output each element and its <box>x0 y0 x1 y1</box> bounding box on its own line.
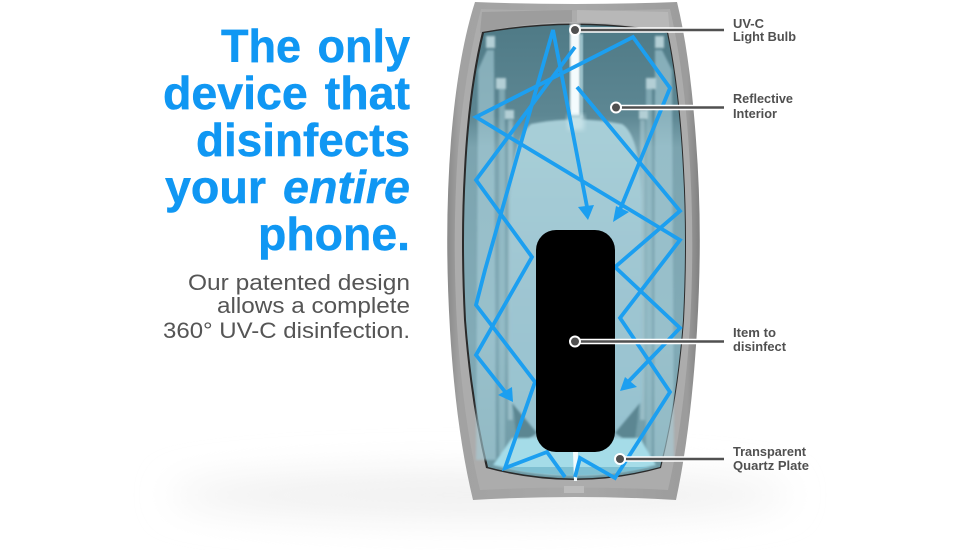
label: UV-C light bulb: UV-C <box>733 16 765 31</box>
black item to disinfect <box>536 230 615 452</box>
arrowhead centre right <box>613 206 629 222</box>
label: reflective interior: Interior <box>733 106 777 121</box>
label: reflective interior: Reflective <box>733 91 793 106</box>
central reflective pod <box>510 120 642 445</box>
title: disinfects <box>196 114 410 166</box>
arrowhead centre left <box>578 205 594 220</box>
leader: UV-C light bulb <box>570 25 724 35</box>
label: transparent quartz plate: Quartz Plate <box>733 458 809 473</box>
arrowhead lower left <box>498 387 513 402</box>
device illustration <box>447 2 700 500</box>
leader: reflective interior <box>611 102 724 112</box>
ray across chamber <box>476 37 680 478</box>
interior chamber <box>462 24 686 480</box>
quartz plate <box>493 438 656 476</box>
title: The only <box>221 20 410 72</box>
label: item to disinfect: Item to <box>733 325 776 340</box>
leader: quartz plate <box>615 454 724 464</box>
outer shell <box>447 2 700 500</box>
floor shadow <box>170 471 790 519</box>
ray from right of bulb <box>577 87 680 382</box>
light bulb column <box>570 24 580 116</box>
subtitle <box>163 270 410 343</box>
leader: item to disinfect <box>570 336 724 346</box>
dark wedges beside pod base <box>512 403 640 446</box>
title: your entire <box>165 161 410 213</box>
subtitle: allows a complete <box>217 293 410 318</box>
ray from upper bulb <box>476 47 575 393</box>
label: reflective interior <box>733 91 793 121</box>
subtitle: 360° UV-C disinfection. <box>163 318 410 343</box>
subtitle: Our patented design <box>188 270 410 295</box>
ray apex to centre <box>476 30 588 477</box>
title: device that <box>163 67 410 119</box>
label: item to disinfect: disinfect <box>733 339 787 354</box>
arrowheads <box>498 205 637 402</box>
base trim <box>564 486 584 493</box>
heat-lamp tubes <box>476 36 674 460</box>
label: UV-C light bulb <box>733 16 796 44</box>
title: phone. <box>258 208 410 260</box>
arrowhead lower right <box>620 377 637 391</box>
title <box>163 20 410 260</box>
UV-C light ray paths <box>476 30 680 478</box>
label: transparent quartz plate <box>733 444 809 473</box>
label: item to disinfect <box>733 325 787 354</box>
label: UV-C light bulb: Light Bulb <box>733 29 796 44</box>
label: transparent quartz plate: Transparent <box>733 444 807 459</box>
